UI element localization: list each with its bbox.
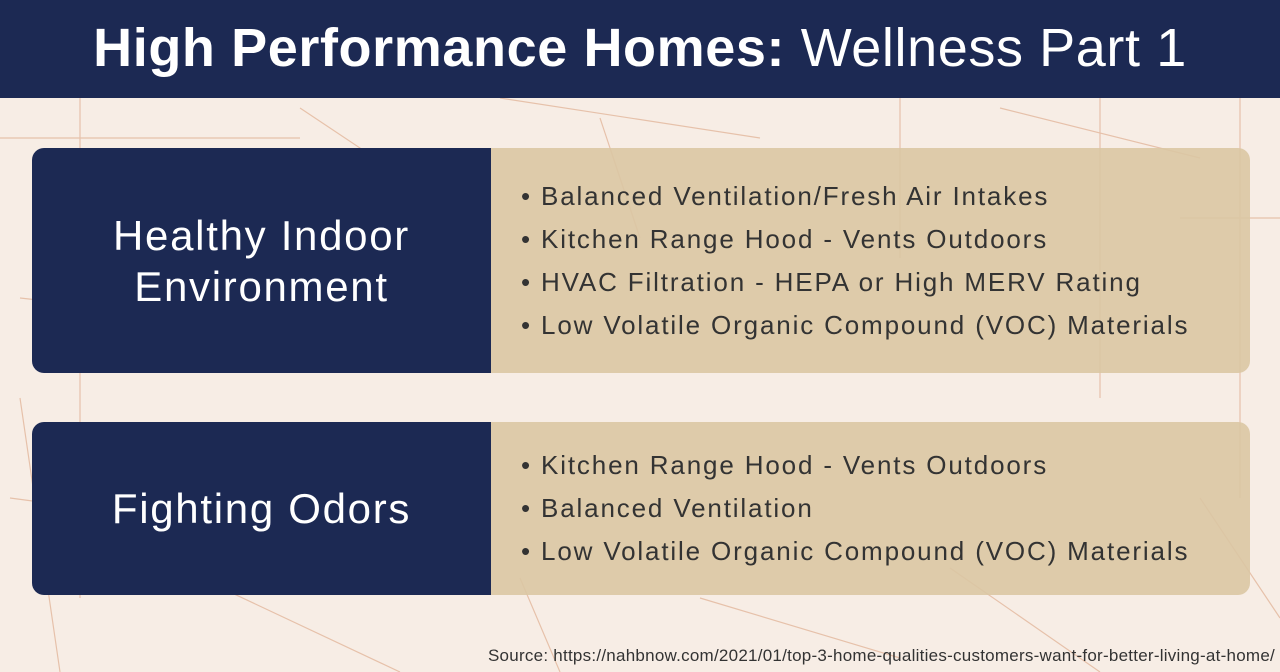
list: healthy indoor items: • Kitchen Range Hood - Vents Outdoors <box>521 224 1048 254</box>
heading: healthy indoor environment: Healthy Indoor <box>113 212 410 258</box>
list: fighting odors items <box>491 422 1250 595</box>
panel: healthy indoor environment <box>32 148 1250 373</box>
list: healthy indoor items <box>491 148 1250 373</box>
heading: healthy indoor environment: Environment <box>134 262 389 310</box>
panel: fighting odors <box>32 422 1250 595</box>
heading: healthy indoor environment <box>32 148 491 373</box>
list: healthy indoor items: • Low Volatile Organic Compound (VOC) Materials <box>521 310 1189 340</box>
list: fighting odors items: • Balanced Ventilation <box>521 493 814 523</box>
source text: Source: https://nahbnow.com/2021/01/top-3-home-qualities-customers-want-for-better-living-at-home/ <box>488 646 1275 665</box>
list: fighting odors items: • Kitchen Range Hood - Vents Outdoors <box>521 450 1048 480</box>
title: High Performance Homes: Wellness Part 1 <box>93 18 1187 78</box>
list: fighting odors items: • Low Volatile Organic Compound (VOC) Materials <box>521 536 1189 566</box>
list: healthy indoor items: • HVAC Filtration - HEPA or High MERV Rating <box>521 266 1142 296</box>
heading: fighting odors <box>32 422 491 595</box>
heading: fighting odors: Fighting Odors <box>112 485 411 532</box>
title <box>0 0 1280 98</box>
list: healthy indoor items: • Balanced Ventilation/Fresh Air Intakes <box>521 180 1049 210</box>
